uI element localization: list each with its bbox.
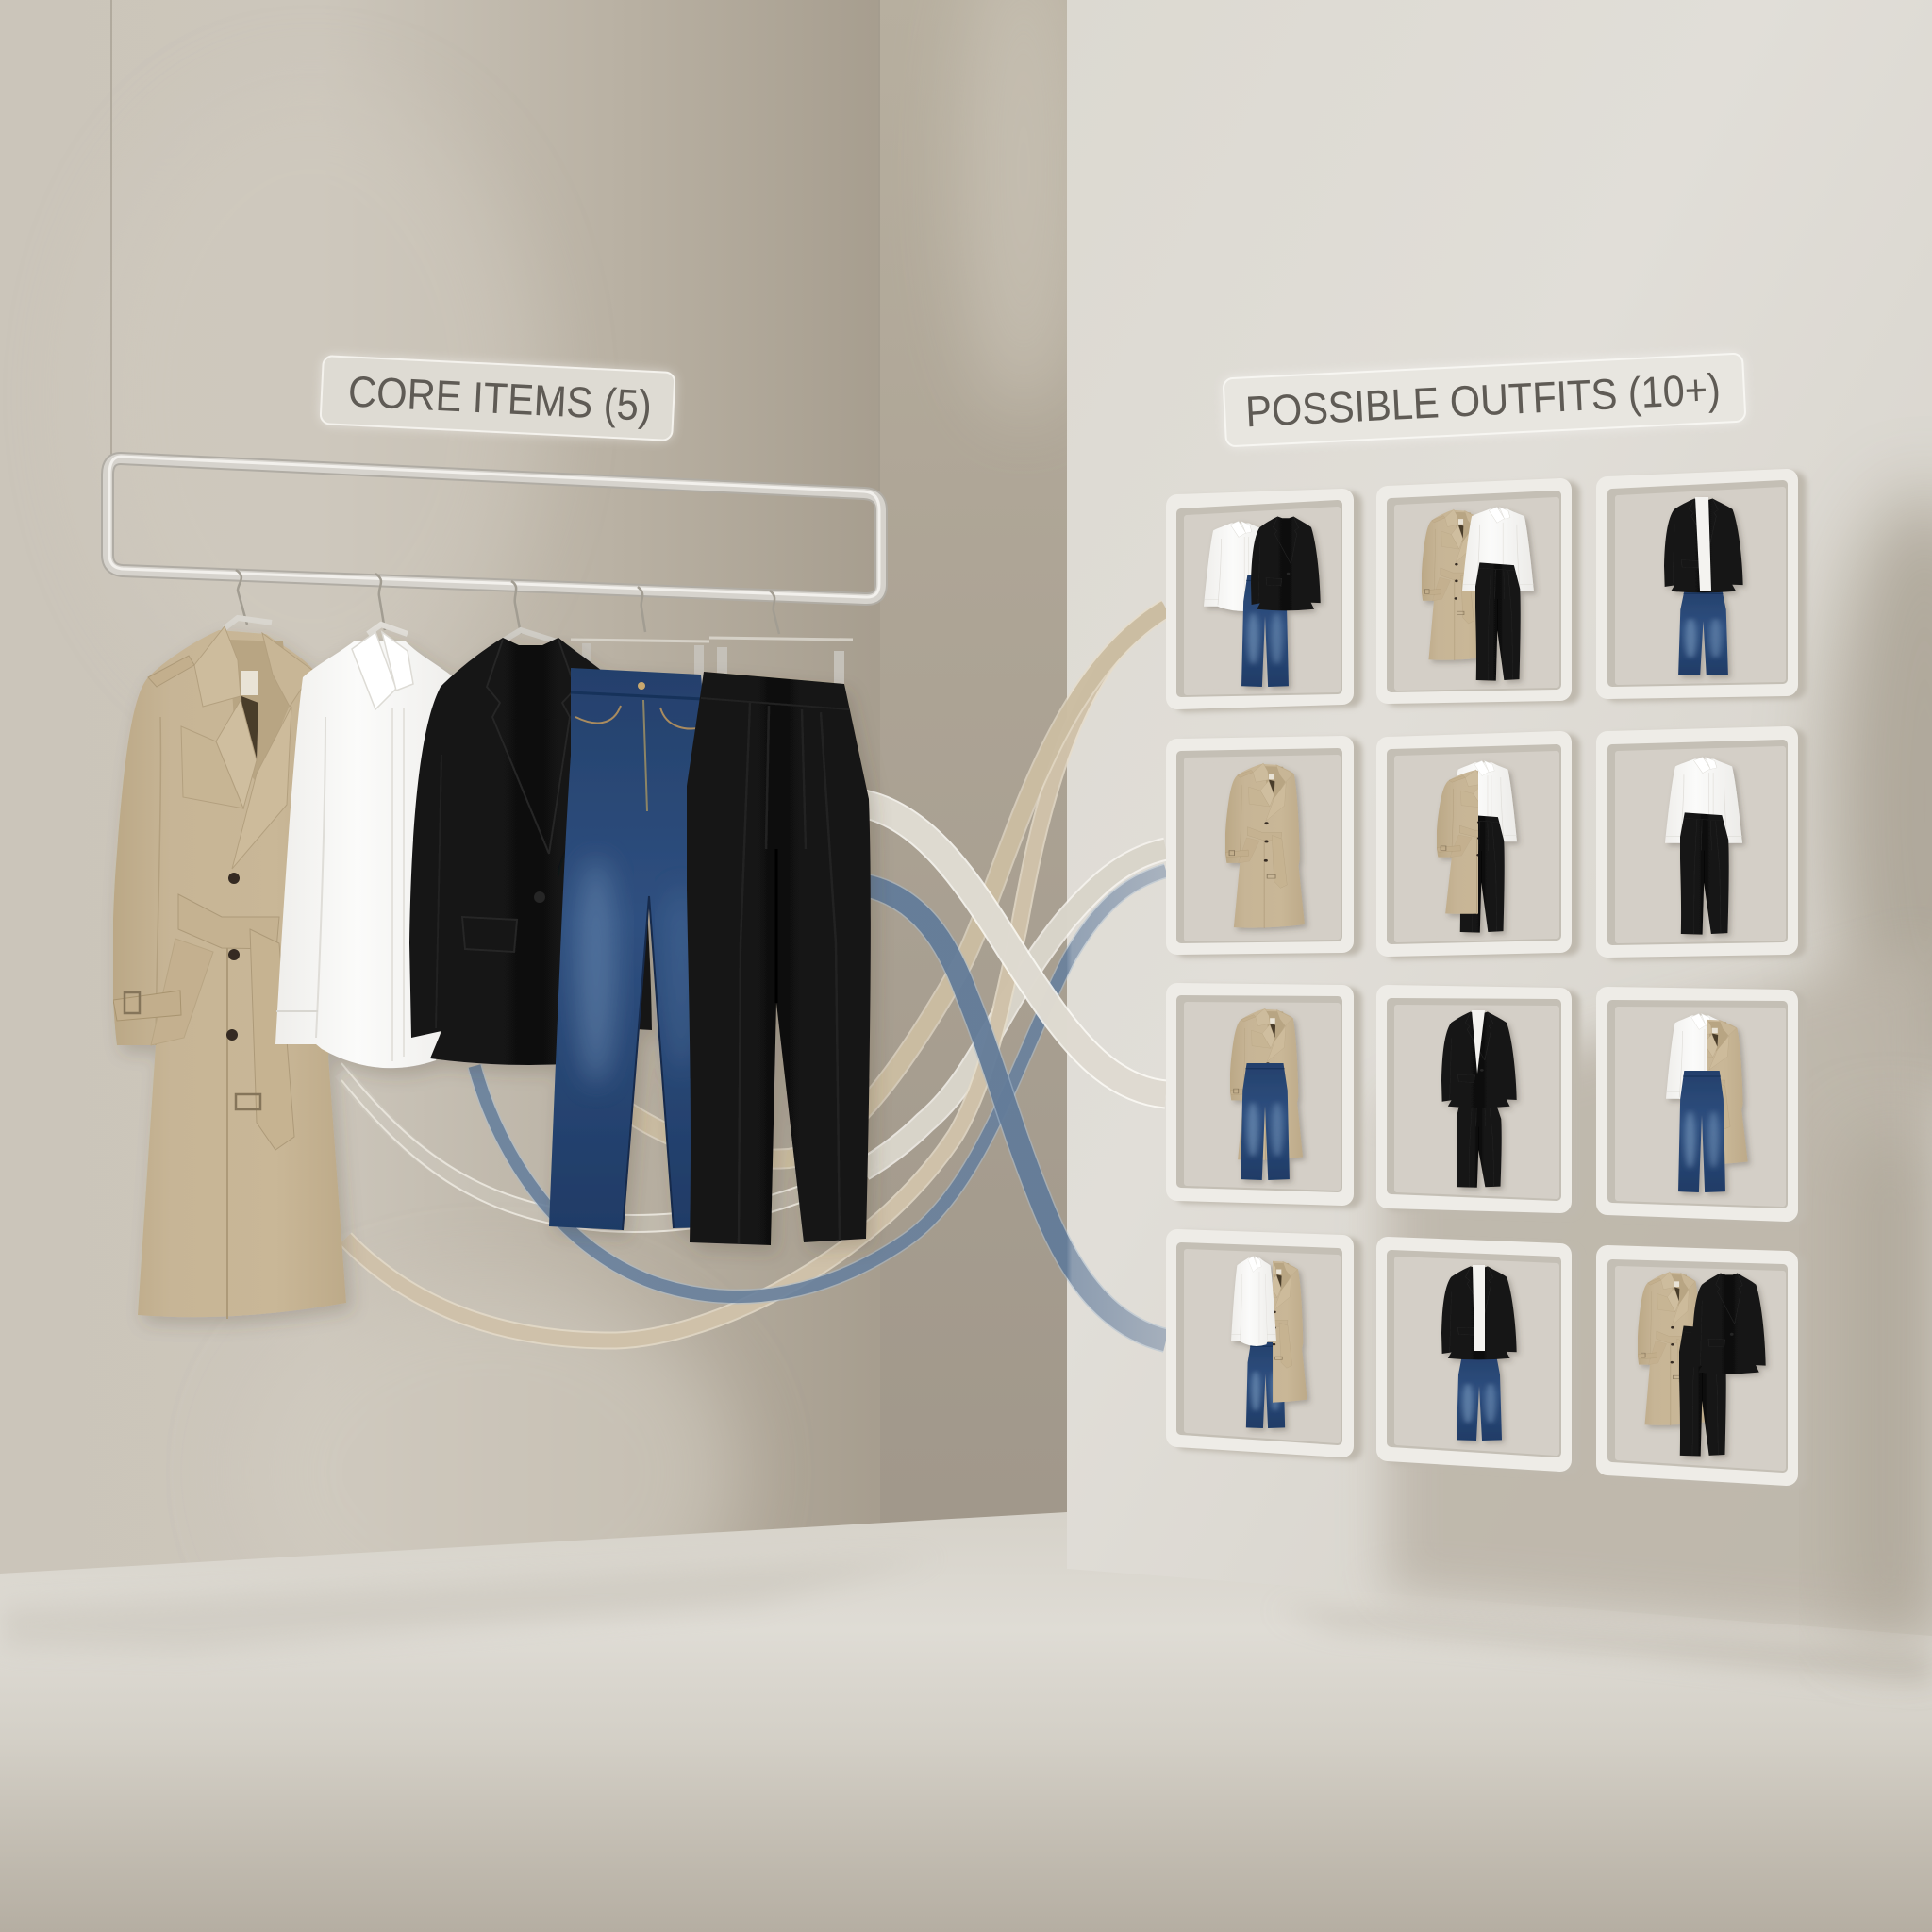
outfit 6 garments xyxy=(1665,757,1742,935)
frame 7: coat, jeans xyxy=(1177,994,1351,1197)
outfit 1 garments xyxy=(1204,516,1321,687)
connecting ribbons xyxy=(341,608,1166,1341)
hanger: trousers clip xyxy=(709,591,853,691)
hanger: shirt xyxy=(368,574,408,634)
frame 9: shirt, half coat, jeans xyxy=(1607,998,1795,1213)
ribbon: tan from jeans xyxy=(623,608,1166,1159)
ribbon: blue to third row xyxy=(475,871,1166,1297)
frame 4: coat xyxy=(1177,747,1351,946)
hanger: coat xyxy=(225,570,272,628)
outfit 3 garments xyxy=(1664,497,1743,675)
outfit 12 garments xyxy=(1638,1272,1766,1457)
hanger: blazer xyxy=(502,581,557,641)
core garments on rail xyxy=(112,626,871,1319)
label: possible outfits: POSSIBLE OUTFITS (10+) xyxy=(1244,364,1722,436)
outfit 7 garments xyxy=(1230,1008,1303,1180)
frame 1: shirt, jeans, blazer xyxy=(1177,500,1351,701)
garment: black blazer xyxy=(409,638,652,1065)
outfit 5 garments xyxy=(1437,760,1519,933)
outfit 8 garments xyxy=(1441,1010,1517,1188)
hanger: jeans clip xyxy=(571,587,709,683)
ribbon: tan from coat xyxy=(345,608,1166,1341)
garment: white shirt xyxy=(275,632,481,1068)
ribbon: white from trousers xyxy=(863,804,1166,1094)
label: core items xyxy=(320,356,675,441)
outfit 2 garments xyxy=(1422,507,1534,681)
outfit 10 garments xyxy=(1231,1256,1307,1428)
ribbon: white from shirt xyxy=(341,849,1166,1232)
outfit 11 garments xyxy=(1441,1265,1517,1441)
background: left wall xyxy=(0,0,1085,1660)
garment: black trousers xyxy=(686,672,871,1245)
outfit grid xyxy=(1177,480,1795,1477)
outfit 9 garments xyxy=(1666,1013,1748,1192)
frame 12: coat, trousers, blazer xyxy=(1607,1257,1795,1477)
ribbon: blue from trousers xyxy=(863,885,1166,1341)
suspension wires xyxy=(111,0,879,492)
frame 10: shirt, half coat, jeans xyxy=(1177,1241,1351,1449)
frame 11: blazer, shirt, jeans xyxy=(1388,1248,1569,1463)
background: right wall xyxy=(1067,0,1932,1636)
hangers xyxy=(225,570,853,691)
clothing rail xyxy=(108,457,881,599)
frame 2: coat, shirt, trousers xyxy=(1388,490,1569,695)
garment: trench coat xyxy=(112,626,346,1319)
frame 8: blazer, trousers xyxy=(1388,996,1569,1205)
frame 6: shirt, trousers xyxy=(1607,738,1795,949)
background: floor xyxy=(0,1512,1932,1932)
frame 5: half coat, shirt, trousers xyxy=(1388,742,1569,948)
garment: blue jeans xyxy=(549,668,747,1230)
label: core items: CORE ITEMS (5) xyxy=(347,366,653,430)
frame 3: blazer, shirt, jeans xyxy=(1607,480,1795,691)
outfit 4 garments xyxy=(1225,763,1305,928)
